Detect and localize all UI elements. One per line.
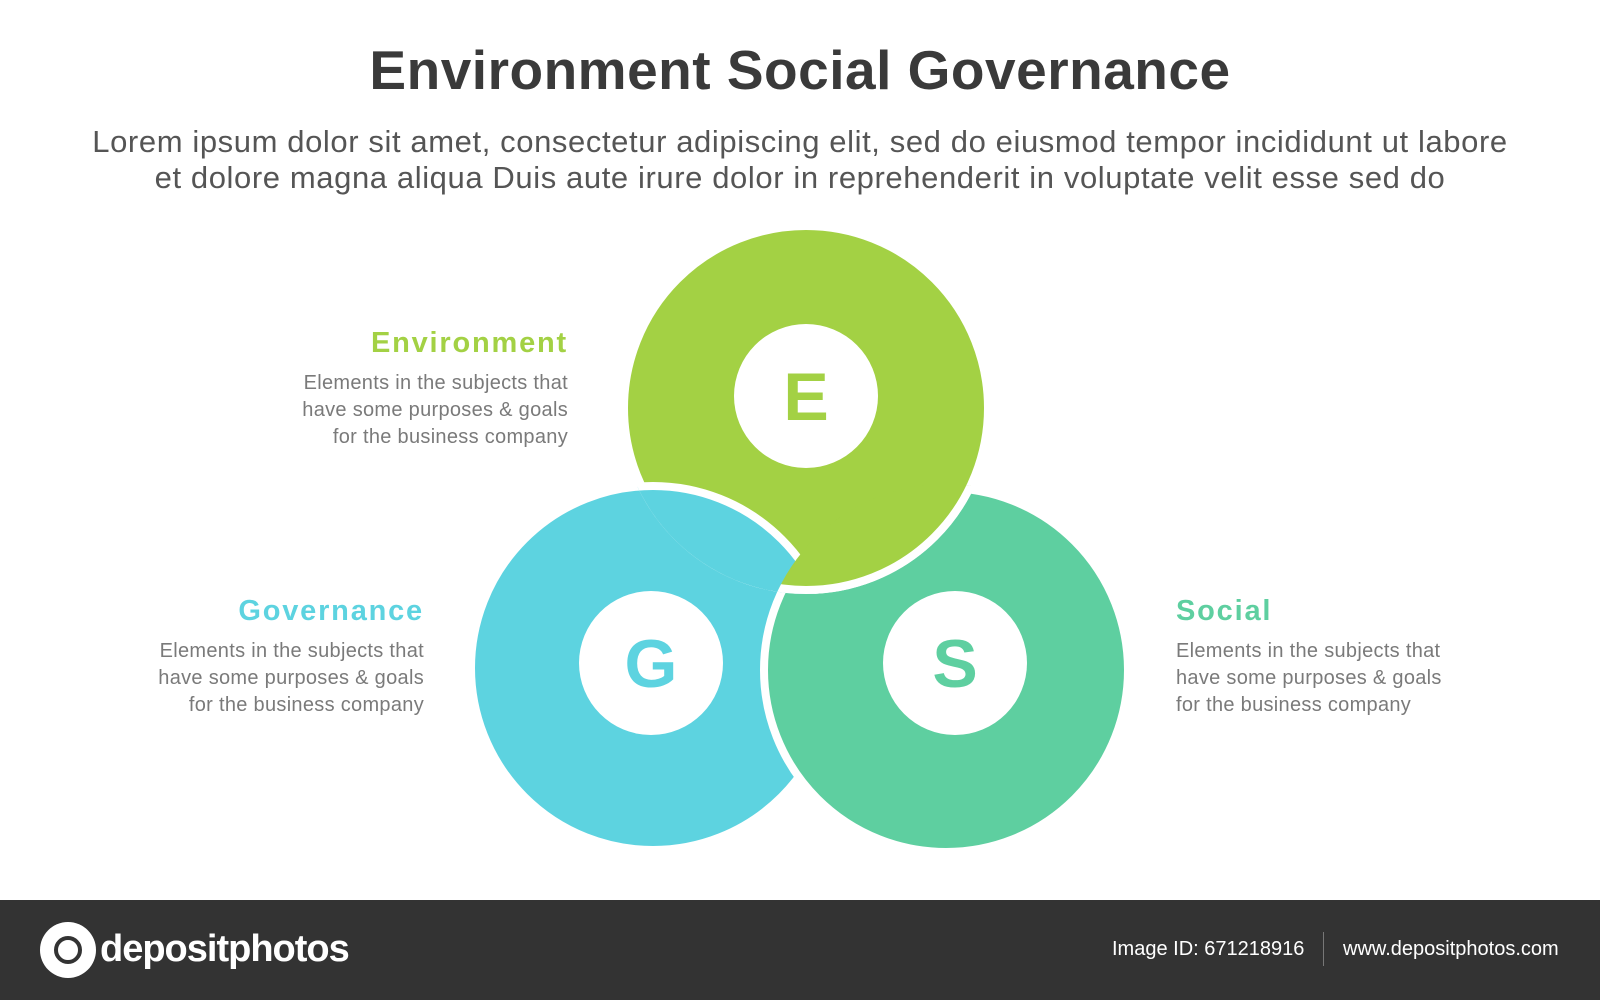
- label: social: Social: [1176, 595, 1272, 627]
- E overlap on S: [777, 485, 971, 594]
- label: environment: Environment: [371, 327, 568, 359]
- label: social: have some purposes & goals: [1176, 667, 1442, 689]
- badge G: [579, 591, 723, 735]
- circle E: [624, 226, 988, 590]
- label: governance: [158, 595, 424, 716]
- label: social: for the business company: [1176, 694, 1411, 716]
- footer bar: www.depositphotos.com: [1343, 938, 1559, 960]
- logo: [40, 922, 96, 978]
- label: governance: Governance: [238, 595, 424, 627]
- badge S: S: [932, 626, 978, 702]
- subtitle: Lorem ipsum dolor sit amet, consectetur adipiscing elit, sed do eiusmod tempor incididunt ut labore: [92, 124, 1508, 159]
- subtitle: [92, 124, 1508, 195]
- label: environment: have some purposes & goals: [302, 399, 568, 421]
- badge E: [734, 324, 878, 468]
- badge E: E: [783, 359, 829, 435]
- label: environment: [302, 327, 568, 448]
- badge G: G: [625, 626, 677, 702]
- circle S: [764, 488, 1128, 852]
- badge S: [883, 591, 1027, 735]
- footer bar: Image ID: 671218916: [1112, 938, 1304, 960]
- venn diagram: [475, 230, 1124, 848]
- label: governance: have some purposes & goals: [158, 667, 424, 689]
- label: social: [1176, 595, 1442, 716]
- label: governance: Elements in the subjects that: [160, 640, 424, 662]
- label: social: Elements in the subjects that: [1176, 640, 1440, 662]
- footer bar: depositphotos: [100, 928, 349, 970]
- label: environment: Elements in the subjects that: [304, 372, 568, 394]
- subtitle: et dolore magna aliqua Duis aute irure dolor in reprehenderit in voluptate velit esse sed do: [155, 160, 1445, 195]
- title: Environment Social Governance: [369, 39, 1231, 101]
- footer bar: [0, 900, 1600, 1000]
- label: governance: for the business company: [189, 694, 424, 716]
- label: environment: for the business company: [333, 426, 568, 448]
- G overlap on E: [638, 482, 824, 594]
- circle G: [471, 486, 835, 850]
